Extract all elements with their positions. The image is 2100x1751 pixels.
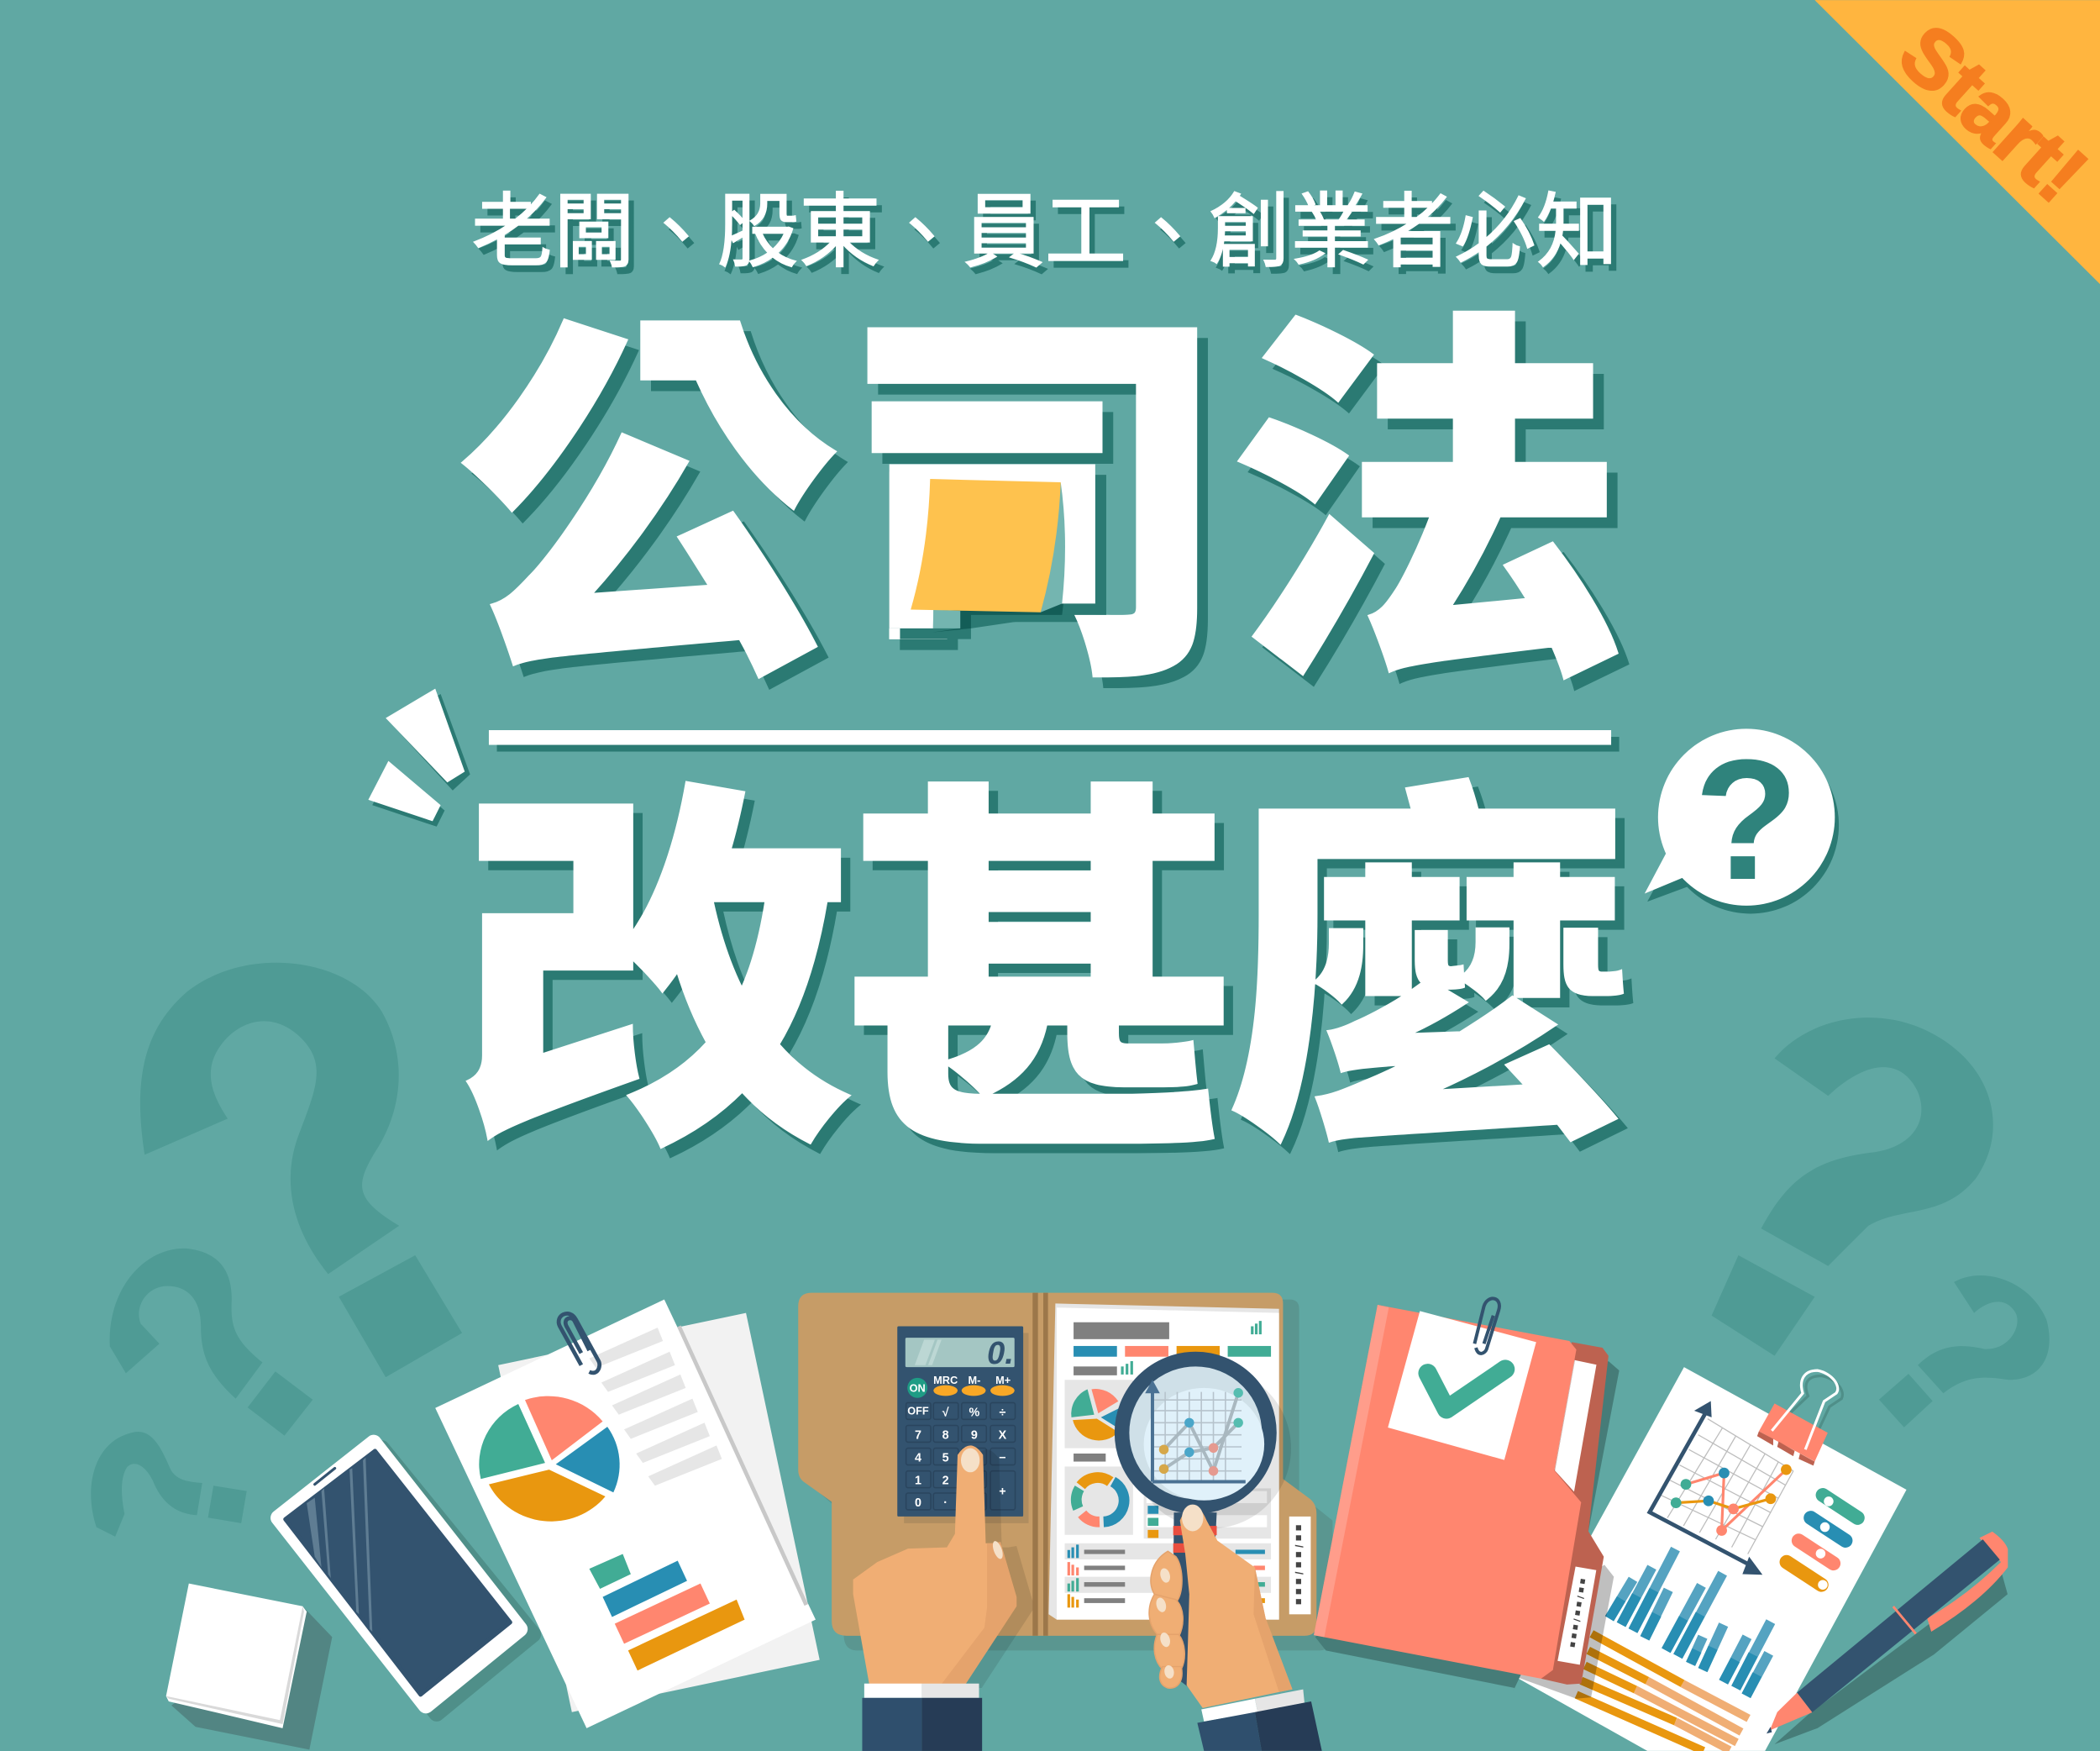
title line 2: 改甚麼: 改 [466,676,863,1229]
title line 1: 公司法 [458,188,1638,764]
report page with pie and bar chart [435,1300,816,1728]
coral folder [1314,1305,1620,1691]
keypad: % [969,1406,980,1419]
keypad: 0 [915,1496,921,1510]
sticky note with backing [890,465,1106,639]
memory keys [933,1374,1015,1396]
keypad: √ [942,1406,949,1419]
table rows [1065,1543,1271,1607]
dashboard document inside folder [1048,1303,1279,1620]
shirt cuff [864,1684,979,1698]
keypad: 8 [942,1428,949,1442]
keypad [906,1402,1016,1510]
corner ribbon: Start!: Start! [1882,6,2100,220]
paperclip [559,1313,600,1373]
legend panel [1144,1488,1271,1538]
lens chart [1145,1380,1246,1481]
on button: ON [910,1382,926,1395]
subtitle: 老闆、股東、員工、創業者必知 [477,172,1623,291]
title line 2: 改甚麼: 甚 [850,676,1247,1229]
sticky pad [166,1584,332,1749]
orange stripes [1577,1633,1749,1751]
keypad: X [999,1428,1007,1442]
divider rule [489,730,1620,752]
note with check mark [1388,1311,1536,1460]
display: 0. [987,1335,1014,1371]
line chart [1650,1401,1793,1575]
title line 2: 改甚麼: 改 [456,666,853,1220]
speech bubble with question mark [1645,724,1839,916]
decorative question marks [91,963,2050,1537]
toggle pills [1787,1495,1857,1590]
phone [279,1443,533,1713]
title line 2: 改甚麼 [456,666,1640,1229]
pen [1767,1532,2008,1744]
binder clip [1757,1370,1842,1465]
folder tab label [1289,1517,1310,1614]
emphasis marks [368,689,470,827]
title line 1: 公司法: 司 [851,198,1240,762]
mini chart icon [1121,1361,1133,1375]
colour legend row [1074,1346,1271,1357]
on button [907,1378,927,1398]
folder tab label [1557,1567,1596,1664]
left hand pressing calculator [853,1445,1032,1751]
keypad: 9 [971,1428,978,1442]
title line 2: 改甚麼: 麼 [1231,676,1640,1229]
title line 1: 公司法: 法 [1237,205,1638,764]
inner paper [1551,1359,1597,1491]
handle [1173,1512,1217,1692]
keypad: 5 [942,1452,949,1465]
shirt cuff [1201,1690,1305,1722]
title line 1: 公司法: 司 [840,188,1229,752]
magnifying glass [1122,1359,1291,1692]
text lines [590,1328,722,1485]
shadow of coral folder [1514,1564,1614,1699]
memory keys: MRC [933,1374,958,1386]
bars [590,1554,744,1670]
right hand holding magnifier [1149,1505,1322,1751]
keypad: 4 [915,1452,921,1465]
title line 2: 改甚麼: 麼 [1222,666,1630,1220]
sleeve [1197,1701,1322,1751]
bar columns [1609,1549,1771,1696]
corner ribbon: Start! [1814,0,2100,284]
pie chart [479,1396,620,1522]
back paper [498,1313,820,1712]
donut panel [1065,1466,1133,1535]
title line 2: 改甚麼: 甚 [841,666,1238,1220]
keypad: 1 [915,1475,921,1488]
title line 1: 公司法: 法 [1226,194,1627,753]
keypad: − [999,1452,1006,1465]
keypad: + [999,1485,1006,1498]
display [906,1335,1015,1371]
keypad: 2 [942,1475,949,1488]
title line 1: 公司法: 公 [469,208,847,760]
paperclip on coral folder [1474,1298,1499,1354]
folder tab label: ■■/■■/■■■ [1293,1524,1305,1605]
title line 1: 公司法: 公 [458,197,836,749]
keypad: · [943,1496,948,1510]
tan folder [798,1293,1332,1650]
small pie panel [1065,1380,1133,1449]
calculator [897,1327,1028,1523]
memory keys: M+ [995,1374,1011,1386]
keypad: ÷ [999,1406,1005,1419]
analytics document [1514,1367,1907,1751]
folder tab label: ■■/■■/■■■ [1567,1578,1588,1648]
keypad: OFF [907,1405,929,1417]
keypad: 7 [915,1428,921,1442]
speech bubble with question mark: ? [1694,724,1798,916]
sleeve [862,1698,982,1751]
subtitle: 老闆、股東、員工、創業者必知 [471,166,1618,284]
mini chart icon [1251,1321,1262,1334]
memory keys: M- [968,1374,980,1386]
